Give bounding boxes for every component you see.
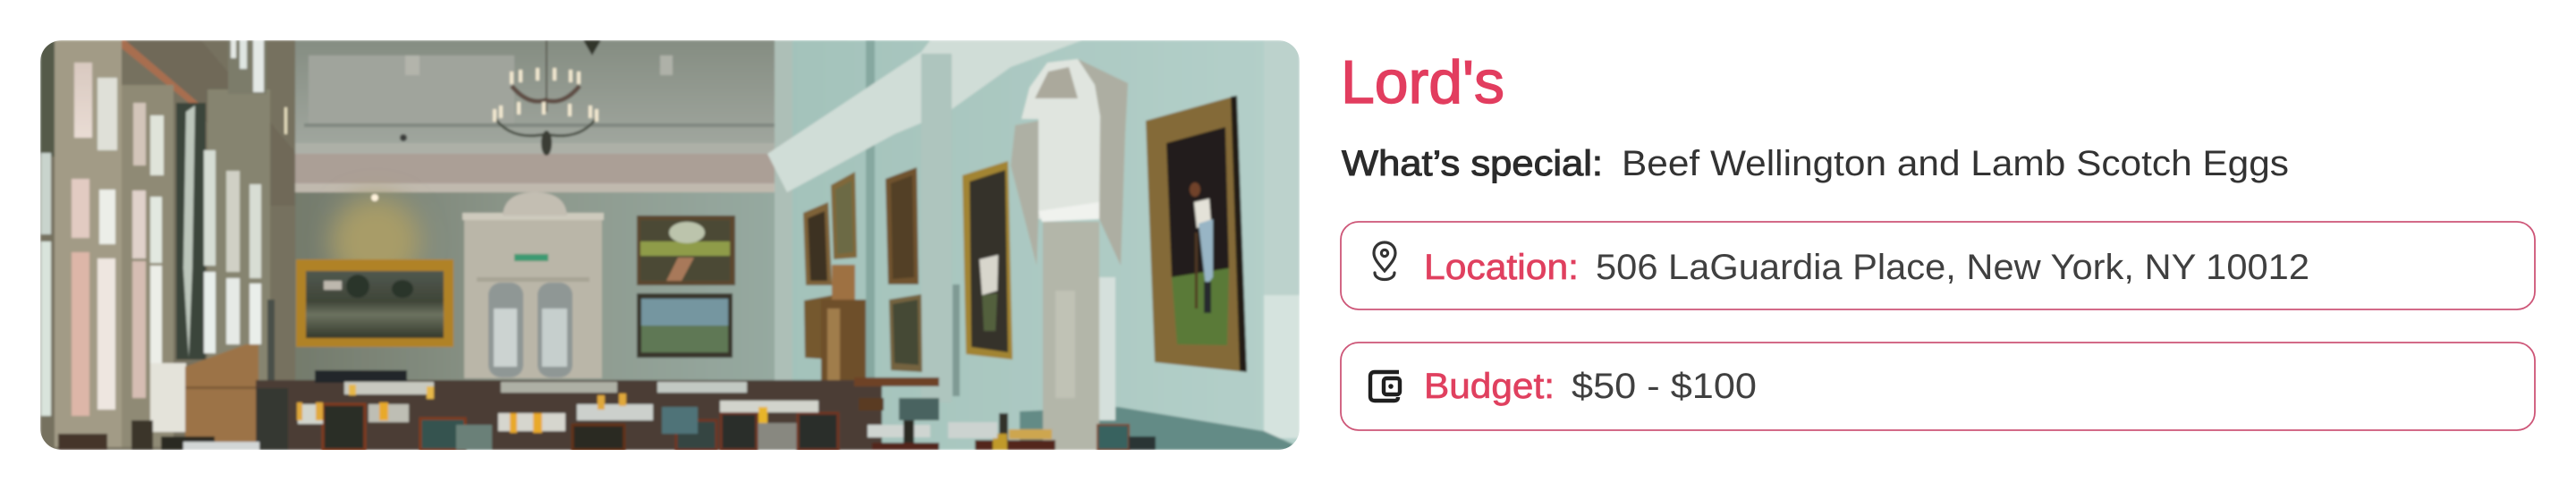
photo: Lord's long room dining hall	[40, 40, 1300, 450]
icon: wallet	[1370, 372, 1400, 401]
location value: 506 LaGuardia Place, New York, NY 10012	[1596, 248, 2309, 287]
painting: cricket match in gold frame	[296, 259, 453, 347]
what's special line	[1342, 144, 2289, 183]
icon: map pin	[1374, 242, 1395, 279]
doorway with white hood	[1011, 59, 1128, 450]
chandelier	[493, 40, 601, 156]
budget label: Budget:	[1424, 367, 1555, 406]
budget value: $50 - $100	[1572, 367, 1757, 406]
right wall	[767, 40, 1300, 450]
lectern and white cabinet	[58, 344, 258, 450]
large portrait of a batsman	[1146, 96, 1247, 372]
back wall paintings	[637, 216, 735, 358]
glazed doorway with pediment	[462, 192, 604, 378]
dining tables and chairs	[161, 370, 1156, 450]
what's special line: Beef Wellington and Lamb Scotch Eggs	[1622, 144, 2289, 183]
budget box	[1341, 343, 2535, 430]
ceiling and back wall	[291, 40, 792, 385]
side wall paintings of cricketers	[803, 161, 1013, 394]
left window wall	[40, 40, 295, 450]
what's special line: What’s special:	[1342, 144, 1603, 183]
location box	[1341, 222, 2535, 309]
restaurant name: Lord's	[1341, 48, 1504, 116]
location label: Location:	[1424, 248, 1579, 287]
